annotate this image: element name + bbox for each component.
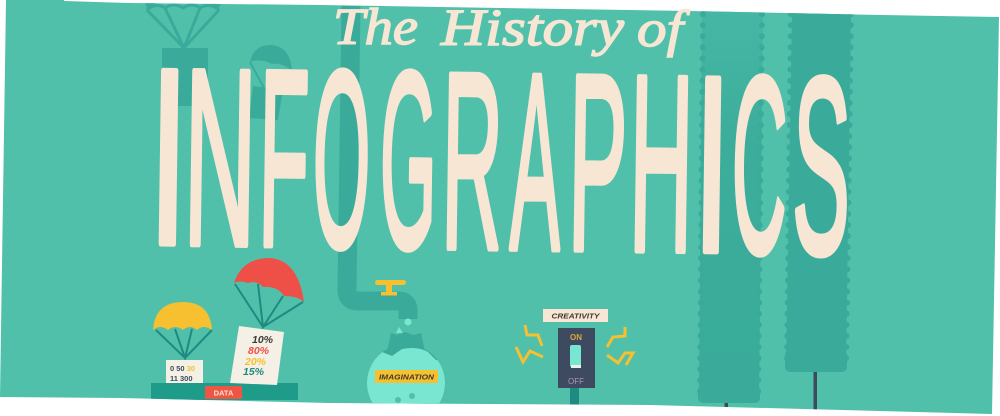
red parachute with percentages paper: 20% <box>244 356 267 368</box>
title: INFOGRAPHICS: S <box>791 25 852 307</box>
water drops <box>396 318 412 333</box>
title: INFOGRAPHICS: A <box>509 22 563 303</box>
title: INFOGRAPHICS: I <box>691 24 733 305</box>
imagination label: IMAGINATION <box>379 372 435 382</box>
switch <box>558 328 595 406</box>
data label <box>205 386 242 399</box>
title: The History of: of <box>637 1 690 58</box>
red parachute with percentages paper: 80% <box>248 345 270 357</box>
red parachute with percentages paper: 15% <box>243 366 265 378</box>
title: INFOGRAPHICS: F <box>257 18 311 299</box>
title: INFOGRAPHICS: N <box>182 18 258 299</box>
pipe <box>347 6 408 319</box>
title: INFOGRAPHICS <box>146 16 852 307</box>
yellow parachute with data paper: 11 300 <box>170 374 193 383</box>
data label: DATA <box>214 388 234 398</box>
title: INFOGRAPHICS: O <box>311 20 372 301</box>
comb tower right <box>785 10 851 412</box>
title: INFOGRAPHICS: G <box>378 21 439 302</box>
faucet handle <box>375 280 406 296</box>
title: The History of <box>333 0 690 58</box>
scene artwork <box>144 0 851 416</box>
yellow parachute with data paper <box>153 302 212 383</box>
title: The History of: The <box>333 0 418 56</box>
red parachute with percentages paper <box>230 258 304 385</box>
title: INFOGRAPHICS: I <box>146 17 191 298</box>
creativity label <box>543 309 608 322</box>
title: The History of: History <box>440 0 625 57</box>
title: INFOGRAPHICS: R <box>440 21 505 302</box>
red parachute with percentages paper: 10% <box>252 334 274 346</box>
icon: small parachute silhouette <box>249 45 292 120</box>
switch: ON <box>570 333 582 342</box>
creativity label: CREATIVITY <box>552 312 601 320</box>
data shelf <box>151 383 298 400</box>
comb tower left <box>698 10 763 411</box>
title: INFOGRAPHICS: H <box>628 23 695 304</box>
icon: gift parachute silhouette <box>144 0 222 106</box>
title: INFOGRAPHICS: P <box>567 22 629 303</box>
title: INFOGRAPHICS: C <box>730 26 789 306</box>
lightning bolts <box>516 325 633 365</box>
yellow parachute with data paper: 0 50 30 <box>170 364 195 373</box>
switch: OFF <box>568 377 584 386</box>
flask <box>367 332 445 404</box>
